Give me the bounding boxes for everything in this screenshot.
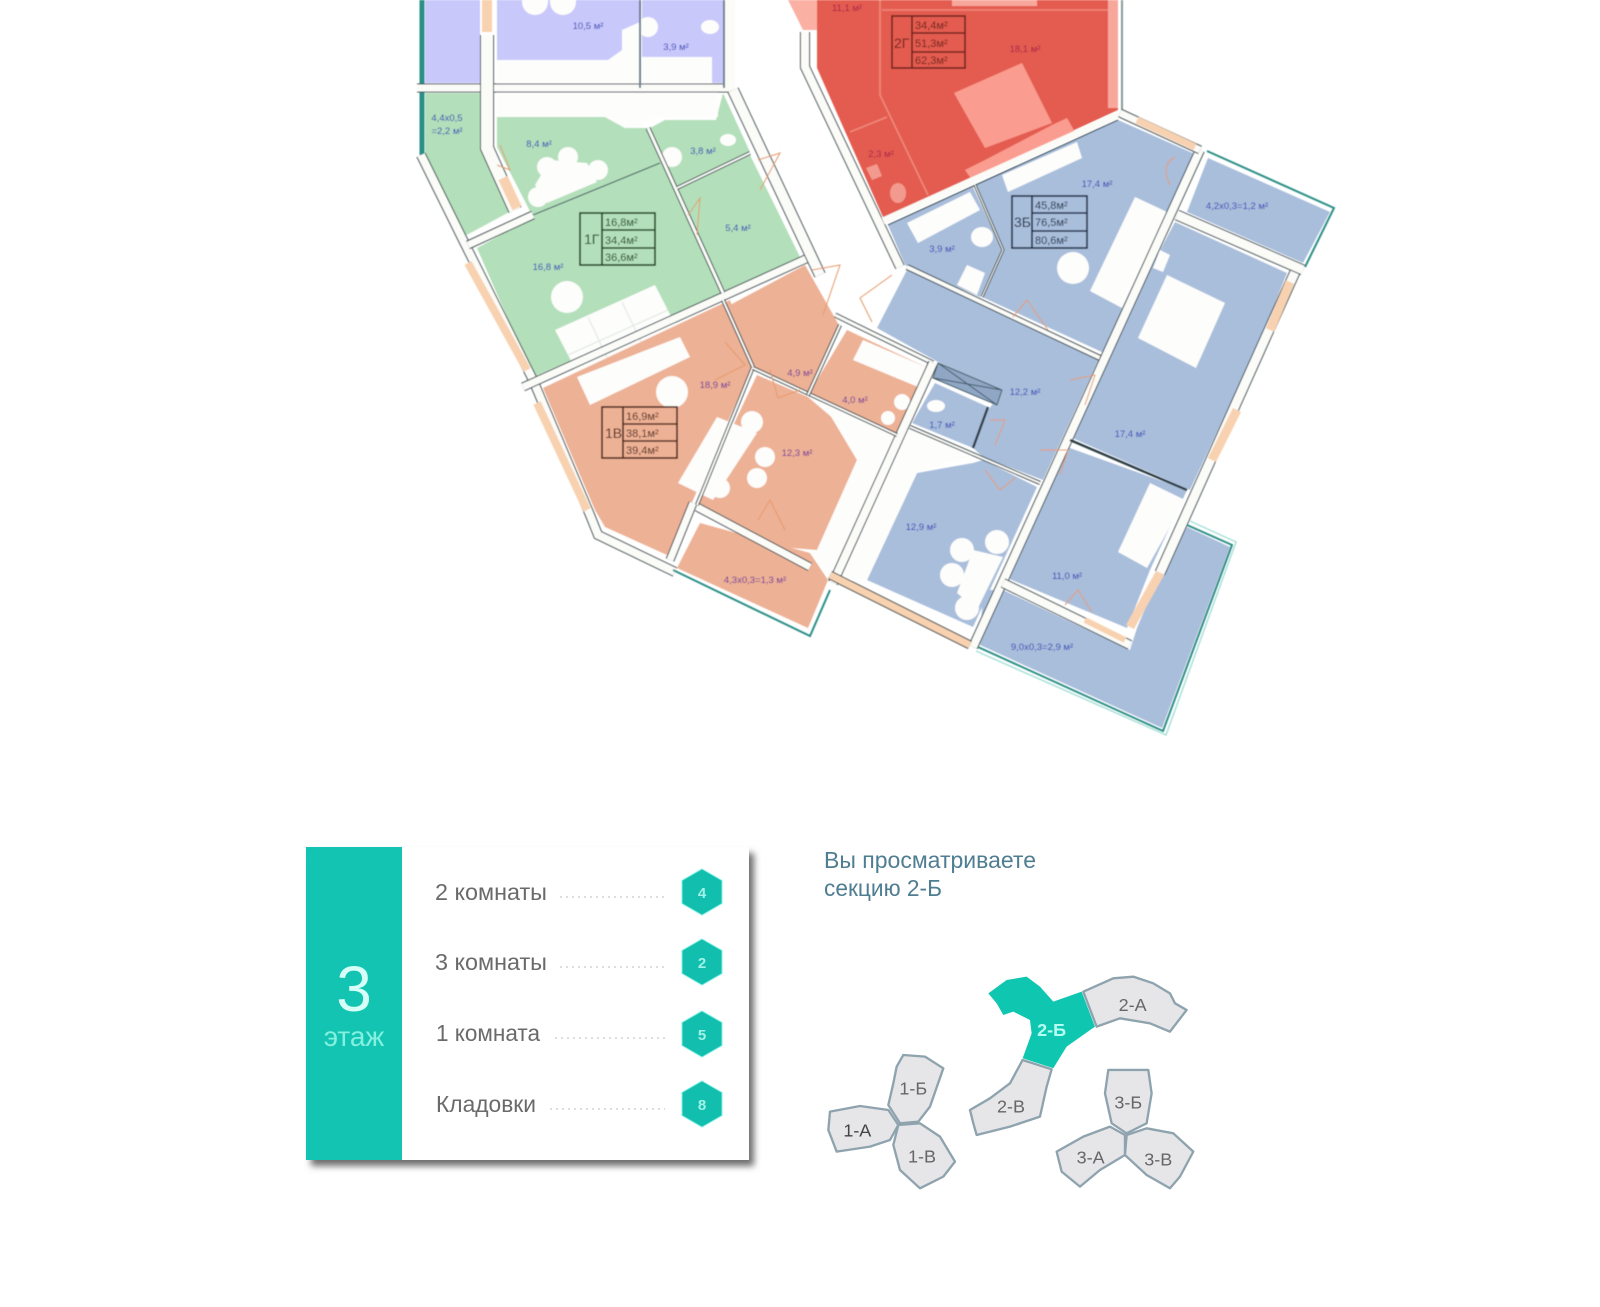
apartment 3Б: blue [833, 120, 1330, 728]
room labels: 4,4x0,5 [431, 113, 463, 124]
room labels: =2,2 м² [431, 126, 463, 137]
section caption [824, 847, 1036, 901]
row: 2 комнаты: 2 комнаты [435, 879, 547, 905]
room labels: 4,9 м² [787, 368, 813, 379]
area table 1В [602, 407, 677, 458]
area table 2Г: 51,3м² [915, 38, 948, 50]
room labels: 8,4 м² [526, 139, 552, 150]
section caption: Вы просматриваете [824, 847, 1036, 873]
area table 1В: 16,9м² [626, 411, 659, 423]
section 3-А [1057, 1127, 1125, 1187]
row: 1 комната: 5 [698, 1027, 706, 1044]
section 3-Б [1105, 1070, 1152, 1133]
floor number block: 3 [336, 953, 372, 1025]
apartment 2Г: red [788, 0, 1122, 217]
room labels: 2,3 м² [868, 149, 894, 160]
area table 2Г: 34,4м² [915, 20, 948, 32]
area table 2Г: 62,3м² [915, 55, 948, 67]
section 3-Б: 3-Б [1114, 1092, 1142, 1112]
area table 2Г: 2Г [894, 35, 910, 51]
row: Кладовки [436, 1081, 722, 1127]
section 3-В [1125, 1128, 1193, 1188]
room labels: 4,3x0,3=1,3 м² [724, 575, 786, 586]
room labels: 5,4 м² [725, 223, 751, 234]
area table 1В: 38,1м² [626, 428, 659, 440]
section 2-В: 2-В [997, 1097, 1025, 1117]
apartment: purple (cropped) [425, 0, 723, 83]
room labels: 17,4 м² [1082, 179, 1112, 190]
row: 3 комнаты: 3 комнаты [435, 949, 547, 975]
room labels: 11,0 м² [1052, 571, 1082, 582]
area table 2Г [892, 16, 965, 68]
section 3-А: 3-А [1077, 1148, 1105, 1168]
section 1-Б [888, 1055, 943, 1123]
section 1-В [893, 1123, 955, 1188]
room labels: 10,5 м² [573, 21, 603, 32]
room labels: 1,7 м² [929, 420, 955, 431]
floor number block: этаж [324, 1021, 385, 1052]
apartment 1Г: green [425, 93, 800, 382]
room labels: 17,4 м² [1115, 429, 1145, 440]
area table 1В: 1В [605, 425, 622, 441]
area table 3Б: 3Б [1014, 214, 1031, 230]
room labels: 11,1 м² [832, 3, 862, 14]
room labels: 12,2 м² [1010, 387, 1040, 398]
section 2-В [970, 1060, 1052, 1135]
area table 3Б: 76,5м² [1035, 217, 1068, 229]
area table 1Г [580, 213, 655, 265]
section 2-А: 2-А [1119, 995, 1147, 1015]
room labels: 12,3 м² [782, 448, 812, 459]
section 1-В: 1-В [908, 1147, 936, 1167]
area table 3Б: 45,8м² [1035, 200, 1068, 212]
room labels: 12,9 м² [906, 522, 936, 533]
area table 1Г: 1Г [584, 231, 600, 247]
door swings [497, 145, 1175, 612]
section map [828, 977, 1193, 1188]
row: 3 комнаты: 2 [698, 955, 706, 972]
room labels: 4,2x0,3=1,2 м² [1206, 201, 1268, 212]
room labels [431, 3, 1268, 653]
apartment 1В: orange [543, 265, 928, 628]
row: Кладовки: Кладовки [436, 1091, 536, 1117]
floor plan [417, 0, 1334, 735]
room labels: 3,8 м² [690, 146, 716, 157]
section 3-В: 3-В [1144, 1149, 1172, 1169]
room labels: 3,9 м² [929, 244, 955, 255]
area table 1Г: 34,4м² [605, 235, 638, 247]
row: 2 комнаты [435, 869, 722, 915]
floor number block [306, 847, 402, 1160]
section 1-А: 1-А [843, 1121, 871, 1141]
area table 3Б: 80,6м² [1035, 235, 1068, 247]
section 2-А [1083, 977, 1187, 1032]
area table 1В: 39,4м² [626, 445, 659, 457]
room labels: 18,9 м² [700, 380, 730, 391]
balcony glazing [673, 151, 1334, 735]
room labels: 18,1 м² [1010, 44, 1040, 55]
area table 1Г: 36,6м² [605, 252, 638, 264]
section 1-А [828, 1106, 898, 1152]
section 2-Б highlighted: 2-Б [1037, 1020, 1066, 1040]
room labels: 16,8 м² [533, 262, 563, 273]
area table 1Г: 16,8м² [605, 217, 638, 229]
area table 3Б [1012, 196, 1087, 248]
row: 1 комната [436, 1011, 722, 1057]
section 1-Б: 1-Б [899, 1078, 927, 1098]
walls [417, 0, 1303, 647]
section caption: секцию 2-Б [824, 875, 942, 901]
row: 3 комнаты [435, 939, 722, 985]
room labels: 9,0x0,3=2,9 м² [1011, 642, 1073, 653]
row: 2 комнаты: 4 [698, 885, 707, 902]
room labels: 4,0 м² [842, 395, 868, 406]
row: 1 комната: 1 комната [436, 1020, 540, 1046]
section 2-Б highlighted [988, 977, 1095, 1068]
row: Кладовки: 8 [698, 1097, 706, 1114]
room labels: 3,9 м² [663, 42, 689, 53]
panel: floor summary [306, 847, 754, 1166]
